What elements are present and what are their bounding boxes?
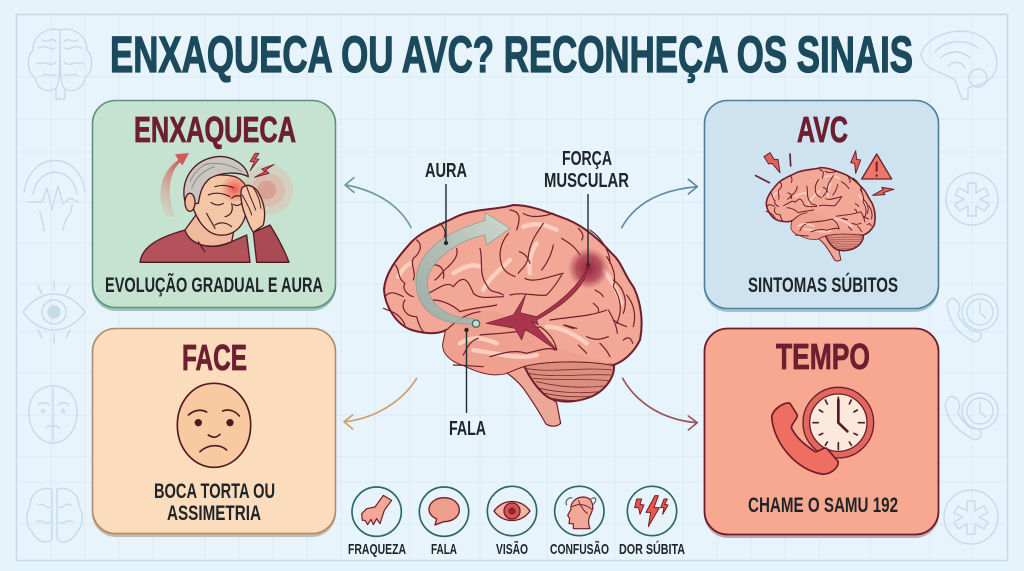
ghost icon: phone and clock: [947, 294, 998, 342]
label: chame o samu 192: CHAME O SAMU 192: [748, 494, 898, 517]
panel: face: [92, 328, 336, 537]
ghost icon: brain top view: [28, 29, 92, 99]
muscle area spot: [568, 248, 609, 289]
callout: aura: [425, 159, 467, 245]
ghost icon: star of life: [944, 490, 998, 544]
label: evolucao gradual e aura: EVOLUÇÃO GRADUAL E AURA: [105, 274, 323, 297]
label: boca torta ou assimetria: BOCA TORTA OU: [154, 480, 275, 503]
ghost icon: face: [29, 386, 77, 443]
heading: avc: AVC: [797, 109, 848, 150]
ghost icon: brain sagittal: [921, 31, 997, 99]
symptom: dor subita: DOR SÚBITA: [619, 540, 685, 558]
heading: enxaqueca: ENXAQUECA: [134, 109, 296, 150]
callout: aura: AURA: [425, 159, 467, 182]
ghost icon: phone and clock: [945, 393, 998, 440]
icon: asymmetric face: [177, 383, 251, 467]
icon: warning signs: [756, 151, 894, 195]
callout: fala: FALA: [449, 417, 486, 440]
callout: forca muscular: FORÇA: [562, 147, 612, 170]
callout: forca muscular: MUSCULAR: [544, 169, 629, 192]
ghost icon: star of life: [946, 173, 998, 225]
callout: fala: [449, 328, 486, 440]
arrow: to face: [344, 378, 417, 429]
stroke pathway: [486, 267, 588, 350]
panel: tempo: [704, 328, 939, 538]
symptom: confusao: [550, 486, 609, 558]
arrow: to avc: [622, 179, 697, 228]
icon: phone and clock: [772, 387, 874, 474]
panel: enxaqueca: [92, 100, 336, 311]
label: boca torta ou assimetria: [154, 480, 275, 525]
symptom: fala: [419, 487, 469, 558]
symptom: confusao: CONFUSÃO: [550, 540, 609, 558]
symptom: visao: VISÃO: [496, 540, 528, 558]
arrow: to tempo: [623, 378, 697, 430]
label: sintomas subitos: SINTOMAS SÚBITOS: [748, 273, 898, 297]
heading: tempo: TEMPO: [776, 336, 870, 377]
ghost icon: brain halves: [27, 488, 82, 542]
symptom: fraqueza: FRAQUEZA: [348, 541, 406, 558]
label: boca torta ou assimetria: ASSIMETRIA: [167, 502, 261, 525]
symptom: dor subita: [619, 486, 685, 558]
arrow: to enxaqueca: [345, 178, 411, 227]
panel: avc: [704, 100, 939, 312]
central brain: [383, 205, 642, 426]
aura start marker: [472, 320, 480, 327]
ghost icon: head with pulse: [24, 160, 85, 231]
illustration: brain: [766, 168, 875, 261]
symptom: fala: FALA: [431, 541, 457, 558]
illustration: man with headache: [140, 153, 293, 262]
callout: forca muscular: [544, 147, 629, 267]
symptom: fraqueza: [348, 487, 406, 558]
symptom: visao: [487, 486, 537, 558]
ghost icon: eye: [23, 281, 85, 343]
heading: face: FACE: [182, 337, 247, 378]
aura arrow: [416, 213, 510, 324]
